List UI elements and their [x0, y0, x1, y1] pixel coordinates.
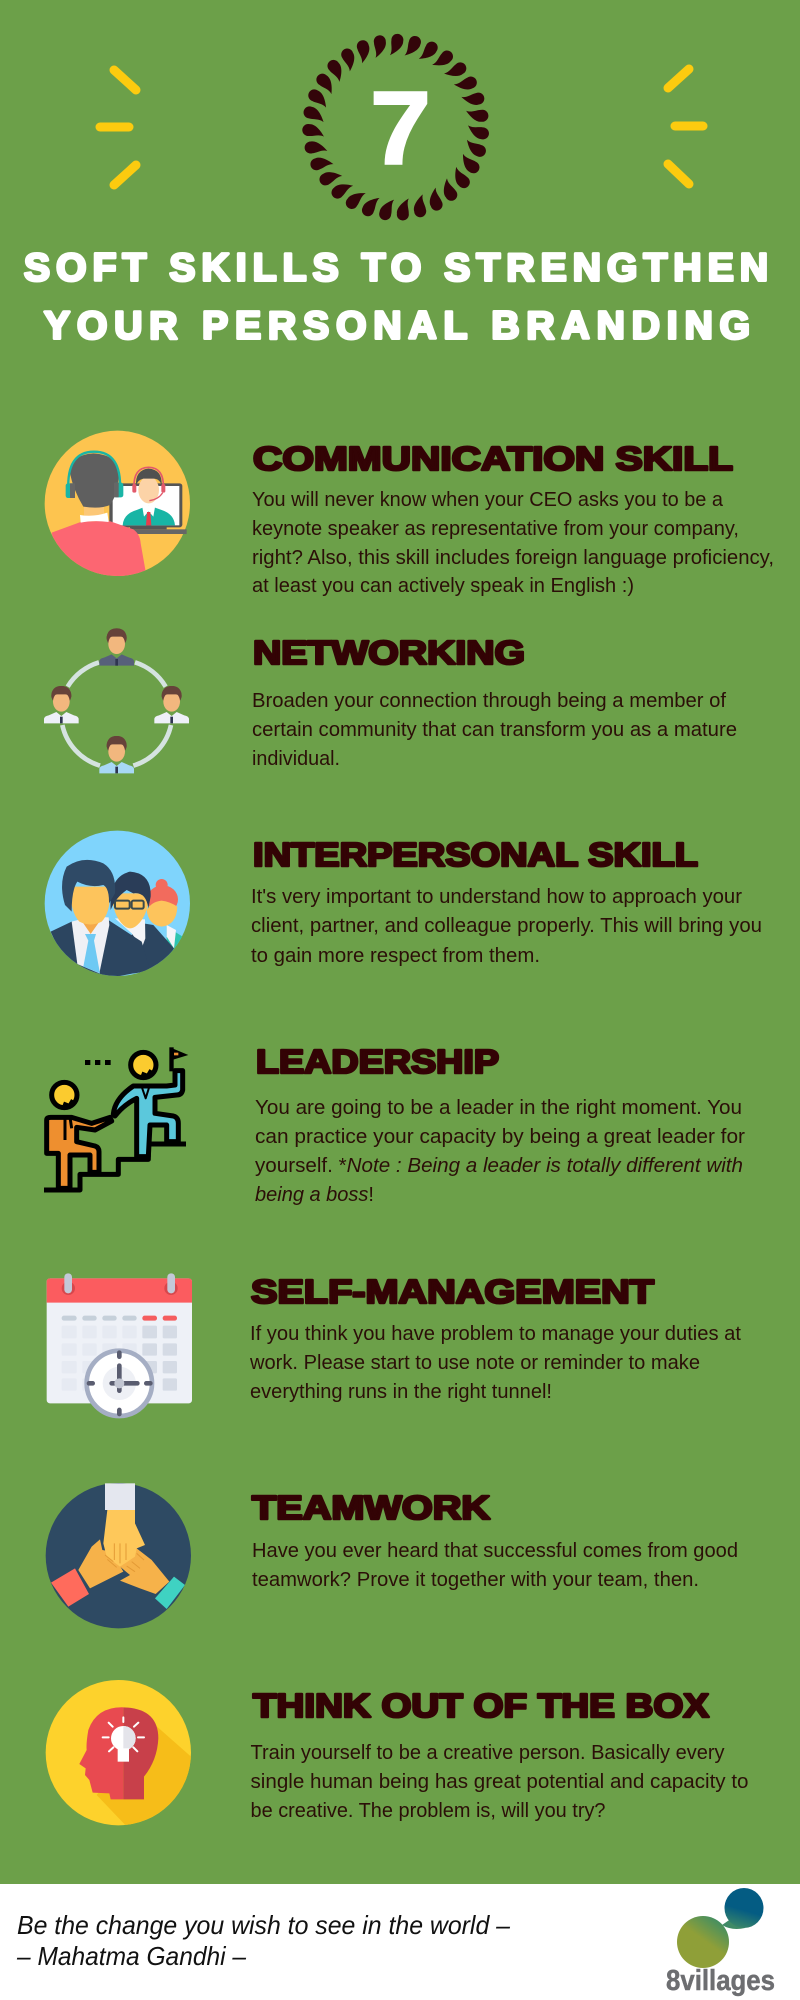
text block: interpersonal skill: It's very important to understand how to approach your — [251, 886, 742, 908]
quote — [16, 1910, 511, 1971]
icon: head with light bulb — [46, 1680, 197, 1830]
text block: communication skill — [252, 489, 774, 597]
text block: leadership — [255, 1097, 745, 1206]
text block: interpersonal skill: to gain more respect from them. — [251, 945, 540, 967]
text block: leadership: can practice your capacity by being a great leader for — [255, 1126, 745, 1148]
heading: leadership: LEADERSHIP — [256, 1044, 499, 1081]
heading: self-management: SELF-MANAGEMENT — [251, 1274, 655, 1311]
number badge: teardrop ring with 7 — [302, 34, 489, 221]
text block: interpersonal skill: client, partner, and colleague properly. This will bring you — [251, 915, 762, 937]
quote: Be the change you wish to see in the world – — [17, 1910, 511, 1940]
heading: teamwork: TEAMWORK — [252, 1490, 490, 1527]
number badge: teardrop ring with 7: 7 — [370, 71, 431, 187]
heading: interpersonal skill: INTERPERSONAL SKILL — [253, 837, 698, 874]
text block: teamwork: Have you ever heard that successful comes from good — [252, 1540, 738, 1562]
title: YOUR PERSONAL BRANDING — [44, 304, 750, 348]
text block: self-management: everything runs in the right tunnel! — [250, 1381, 552, 1403]
heading: think out of the box: THINK OUT OF THE BOX — [253, 1688, 710, 1725]
icon: leader climbing stairs — [44, 1047, 188, 1190]
heading: communication skill: COMMUNICATION SKILL — [253, 441, 733, 478]
quote: – Mahatma Gandhi – — [16, 1941, 247, 1971]
icon: calendar with clock — [47, 1273, 192, 1416]
icon: video call headset — [45, 431, 190, 583]
text block: communication skill: at least you can actively speak in English :) — [252, 575, 634, 597]
text block: teamwork: teamwork? Prove it together with your team, then. — [252, 1569, 699, 1591]
text block: networking: individual. — [252, 748, 340, 770]
text block: networking — [252, 690, 737, 770]
icon: network circle of people — [44, 628, 189, 773]
text block: leadership: You are going to be a leader in the right moment. You — [255, 1097, 742, 1119]
text block: communication skill: You will never know when your CEO asks you to be a — [252, 489, 724, 511]
text block: leadership: yourself. *Note : Being a leader is totally different with — [255, 1155, 743, 1177]
decorative sun rays right — [668, 69, 703, 184]
text block: think out of the box — [250, 1742, 748, 1822]
text block: networking: Broaden your connection through being a member of — [252, 690, 726, 712]
text block: self-management: If you think you have problem to manage your duties at — [250, 1323, 741, 1345]
text block: networking: certain community that can transform you as a mature — [252, 719, 737, 741]
text block: communication skill: right? Also, this skill includes foreign language proficiency, — [252, 547, 774, 569]
heading: networking: NETWORKING — [253, 635, 525, 672]
text block: teamwork — [252, 1540, 738, 1591]
text block: think out of the box: Train yourself to be a creative person. Basically every — [250, 1742, 724, 1764]
text block: communication skill: keynote speaker as representative from your company, — [252, 518, 739, 540]
logo: 8villages: 8villages — [666, 1965, 775, 1997]
icon: teamwork hands — [46, 1483, 191, 1628]
text block: leadership: being a boss! — [255, 1184, 374, 1206]
title: SOFT SKILLS TO STRENGTHEN — [24, 246, 768, 290]
text block: self-management: work. Please start to use note or reminder to make — [249, 1352, 700, 1374]
text block: think out of the box: be creative. The problem is, will you try? — [250, 1800, 606, 1822]
footer panel — [0, 1884, 800, 2000]
icon: business people group — [45, 831, 193, 980]
logo: 8villages — [666, 1888, 775, 1997]
title — [24, 246, 768, 348]
decorative sun rays left — [100, 70, 136, 185]
text block: think out of the box: single human being has great potential and capacity to — [250, 1771, 748, 1793]
text block: interpersonal skill — [251, 886, 762, 967]
text block: self-management — [249, 1323, 741, 1403]
